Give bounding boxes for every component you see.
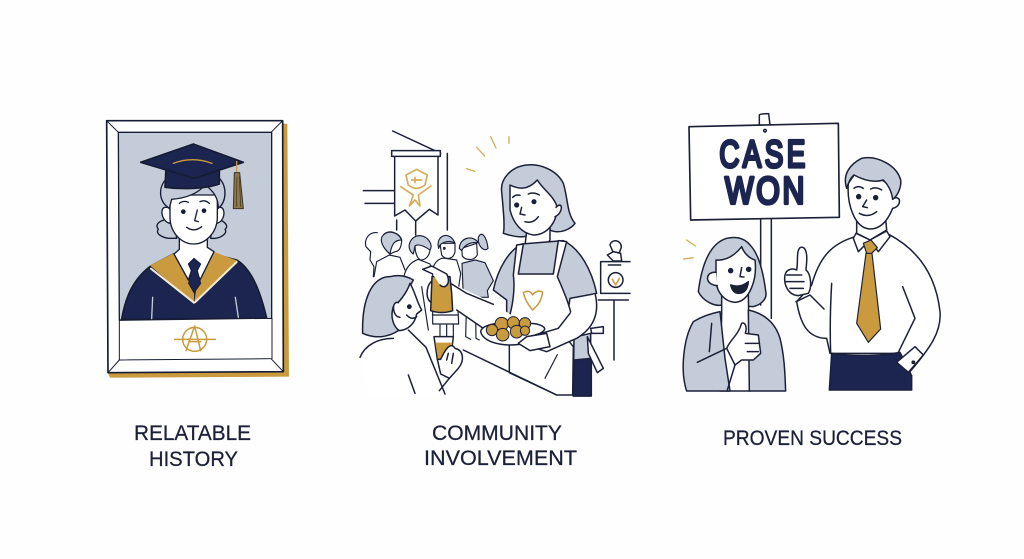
- panel: relatable history framed portrait: [107, 121, 289, 378]
- frame mitre lines: [107, 121, 283, 373]
- person five with ponytail: [422, 234, 493, 340]
- ears: [162, 207, 224, 223]
- label: relatable history: RELATABLE: [134, 422, 251, 445]
- case won sign: [689, 123, 839, 220]
- sparkles: [683, 240, 695, 259]
- face features: [179, 201, 209, 230]
- sparkle lines: [467, 137, 509, 171]
- sign text: WON: [725, 171, 807, 213]
- apron folds: [545, 355, 557, 378]
- arm with pitcher: [423, 266, 513, 337]
- right forearm holding plate: [530, 293, 597, 352]
- apron ties and navy panel: [573, 333, 591, 396]
- gold emblem: [175, 326, 215, 351]
- person two: [374, 232, 405, 277]
- collar white trim: [151, 262, 237, 303]
- shirt: [797, 233, 940, 372]
- gold collar: [150, 252, 237, 304]
- neck: [525, 227, 550, 247]
- label: community involvement: [424, 422, 577, 470]
- navy trousers: [829, 352, 912, 390]
- client woman: [683, 237, 786, 391]
- face: [510, 180, 557, 235]
- label: community involvement: COMMUNITY: [432, 422, 562, 445]
- hair back: [502, 165, 575, 237]
- thumbs up hand: [785, 247, 811, 296]
- man features: [857, 195, 861, 199]
- person four with dress and legs: [432, 235, 461, 337]
- neck and shirt: [174, 238, 214, 280]
- counter edge: [463, 350, 557, 395]
- graduation gown: [122, 254, 267, 319]
- seated customer: [360, 276, 462, 395]
- gold tie: [857, 253, 881, 342]
- neck: [857, 212, 887, 240]
- grey portrait background: [118, 132, 272, 320]
- collar: [853, 231, 890, 252]
- apron with heart: [509, 241, 573, 395]
- ear and features: [555, 205, 561, 217]
- grey hair: [845, 158, 901, 199]
- crowd of people in queue: [366, 232, 493, 340]
- hair: [161, 178, 225, 208]
- necktie: [188, 258, 201, 293]
- panel: community involvement scene: [360, 131, 630, 396]
- label: relatable history: HISTORY: [149, 448, 238, 471]
- label: relatable history: [134, 422, 251, 471]
- banner with gold crest: [363, 131, 447, 235]
- sign text: [719, 134, 809, 213]
- face: [170, 195, 217, 244]
- sign post: [759, 114, 771, 318]
- server woman: [493, 165, 603, 396]
- gown sleeve folds: [152, 297, 238, 319]
- white name plate: [119, 318, 272, 360]
- person three: [403, 236, 433, 280]
- tassel: [233, 162, 243, 209]
- plate of pastries: [481, 317, 550, 351]
- frame gold shadow: [107, 123, 289, 378]
- sign text: CASE: [719, 134, 809, 176]
- person far left: [366, 233, 377, 277]
- side hair curls: [157, 217, 227, 238]
- label: community involvement: INVOLVEMENT: [424, 447, 577, 470]
- mortarboard cap: [141, 144, 243, 189]
- panel: proven success sign and people: [683, 114, 940, 391]
- grey t-shirt: [493, 241, 597, 320]
- label: proven success: PROVEN SUCCESS: [723, 427, 902, 450]
- right side podium: [598, 241, 630, 360]
- white frame: [107, 121, 283, 373]
- shirt cuff: [897, 347, 923, 372]
- head and ear: [848, 167, 900, 229]
- lawyer man: [785, 158, 940, 390]
